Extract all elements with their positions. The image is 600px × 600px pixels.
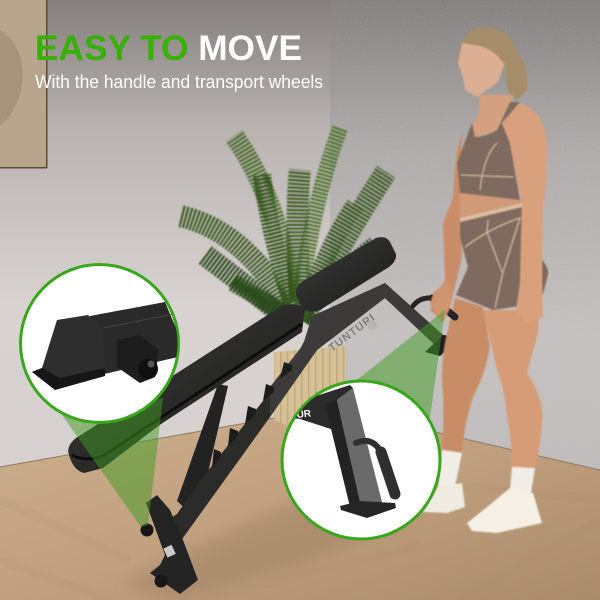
front sock <box>510 467 535 500</box>
hand on grip <box>430 282 454 321</box>
ladder notches <box>212 362 292 467</box>
rail tube <box>90 302 178 375</box>
potted plant <box>180 128 386 431</box>
far shoe <box>423 483 465 513</box>
callout circle: handle <box>282 381 440 539</box>
near arm <box>502 103 547 323</box>
main frame rail and handle arm <box>165 283 443 542</box>
framed art on wall <box>0 0 48 168</box>
front leg <box>483 310 542 467</box>
transport wheels <box>140 524 168 588</box>
subtitle: With the handle and transport wheels <box>35 72 323 92</box>
green highlight cone to handle <box>353 310 445 417</box>
far arm <box>430 133 462 322</box>
seat pad <box>68 304 305 473</box>
wheel housing <box>117 335 159 383</box>
brand on frame: UR <box>296 408 312 421</box>
adjuster knob <box>367 320 377 330</box>
base foot bar <box>146 495 198 594</box>
bench <box>68 237 461 594</box>
far leg <box>442 298 490 452</box>
handle <box>356 441 395 494</box>
crop top <box>457 102 520 200</box>
shorts <box>456 203 548 310</box>
base lip <box>32 368 105 390</box>
hair and ponytail <box>462 27 528 100</box>
front shoe <box>467 488 542 533</box>
person <box>423 27 548 533</box>
post face <box>337 388 382 510</box>
plant fronds <box>180 128 386 322</box>
rear support leg <box>177 384 228 513</box>
midriff <box>460 190 522 222</box>
plant pot <box>274 346 346 431</box>
end cap <box>32 315 99 378</box>
handle grip <box>413 298 455 317</box>
handle plate <box>425 335 461 356</box>
floor shadow under bench <box>120 480 420 600</box>
wheel <box>138 359 158 379</box>
green highlight cone to wheel <box>62 398 163 527</box>
upper frame <box>295 385 353 430</box>
callout circle: transport wheel <box>20 264 178 422</box>
post side <box>326 400 360 504</box>
brand on frame: TUNTURI <box>327 312 378 354</box>
neck and chest <box>472 95 513 137</box>
title: EASY TO MOVE <box>35 29 302 68</box>
upper frame plate <box>270 283 443 417</box>
head and face <box>458 43 507 97</box>
far sock <box>438 450 462 487</box>
base plate <box>340 501 396 518</box>
backrest pad <box>296 237 396 312</box>
